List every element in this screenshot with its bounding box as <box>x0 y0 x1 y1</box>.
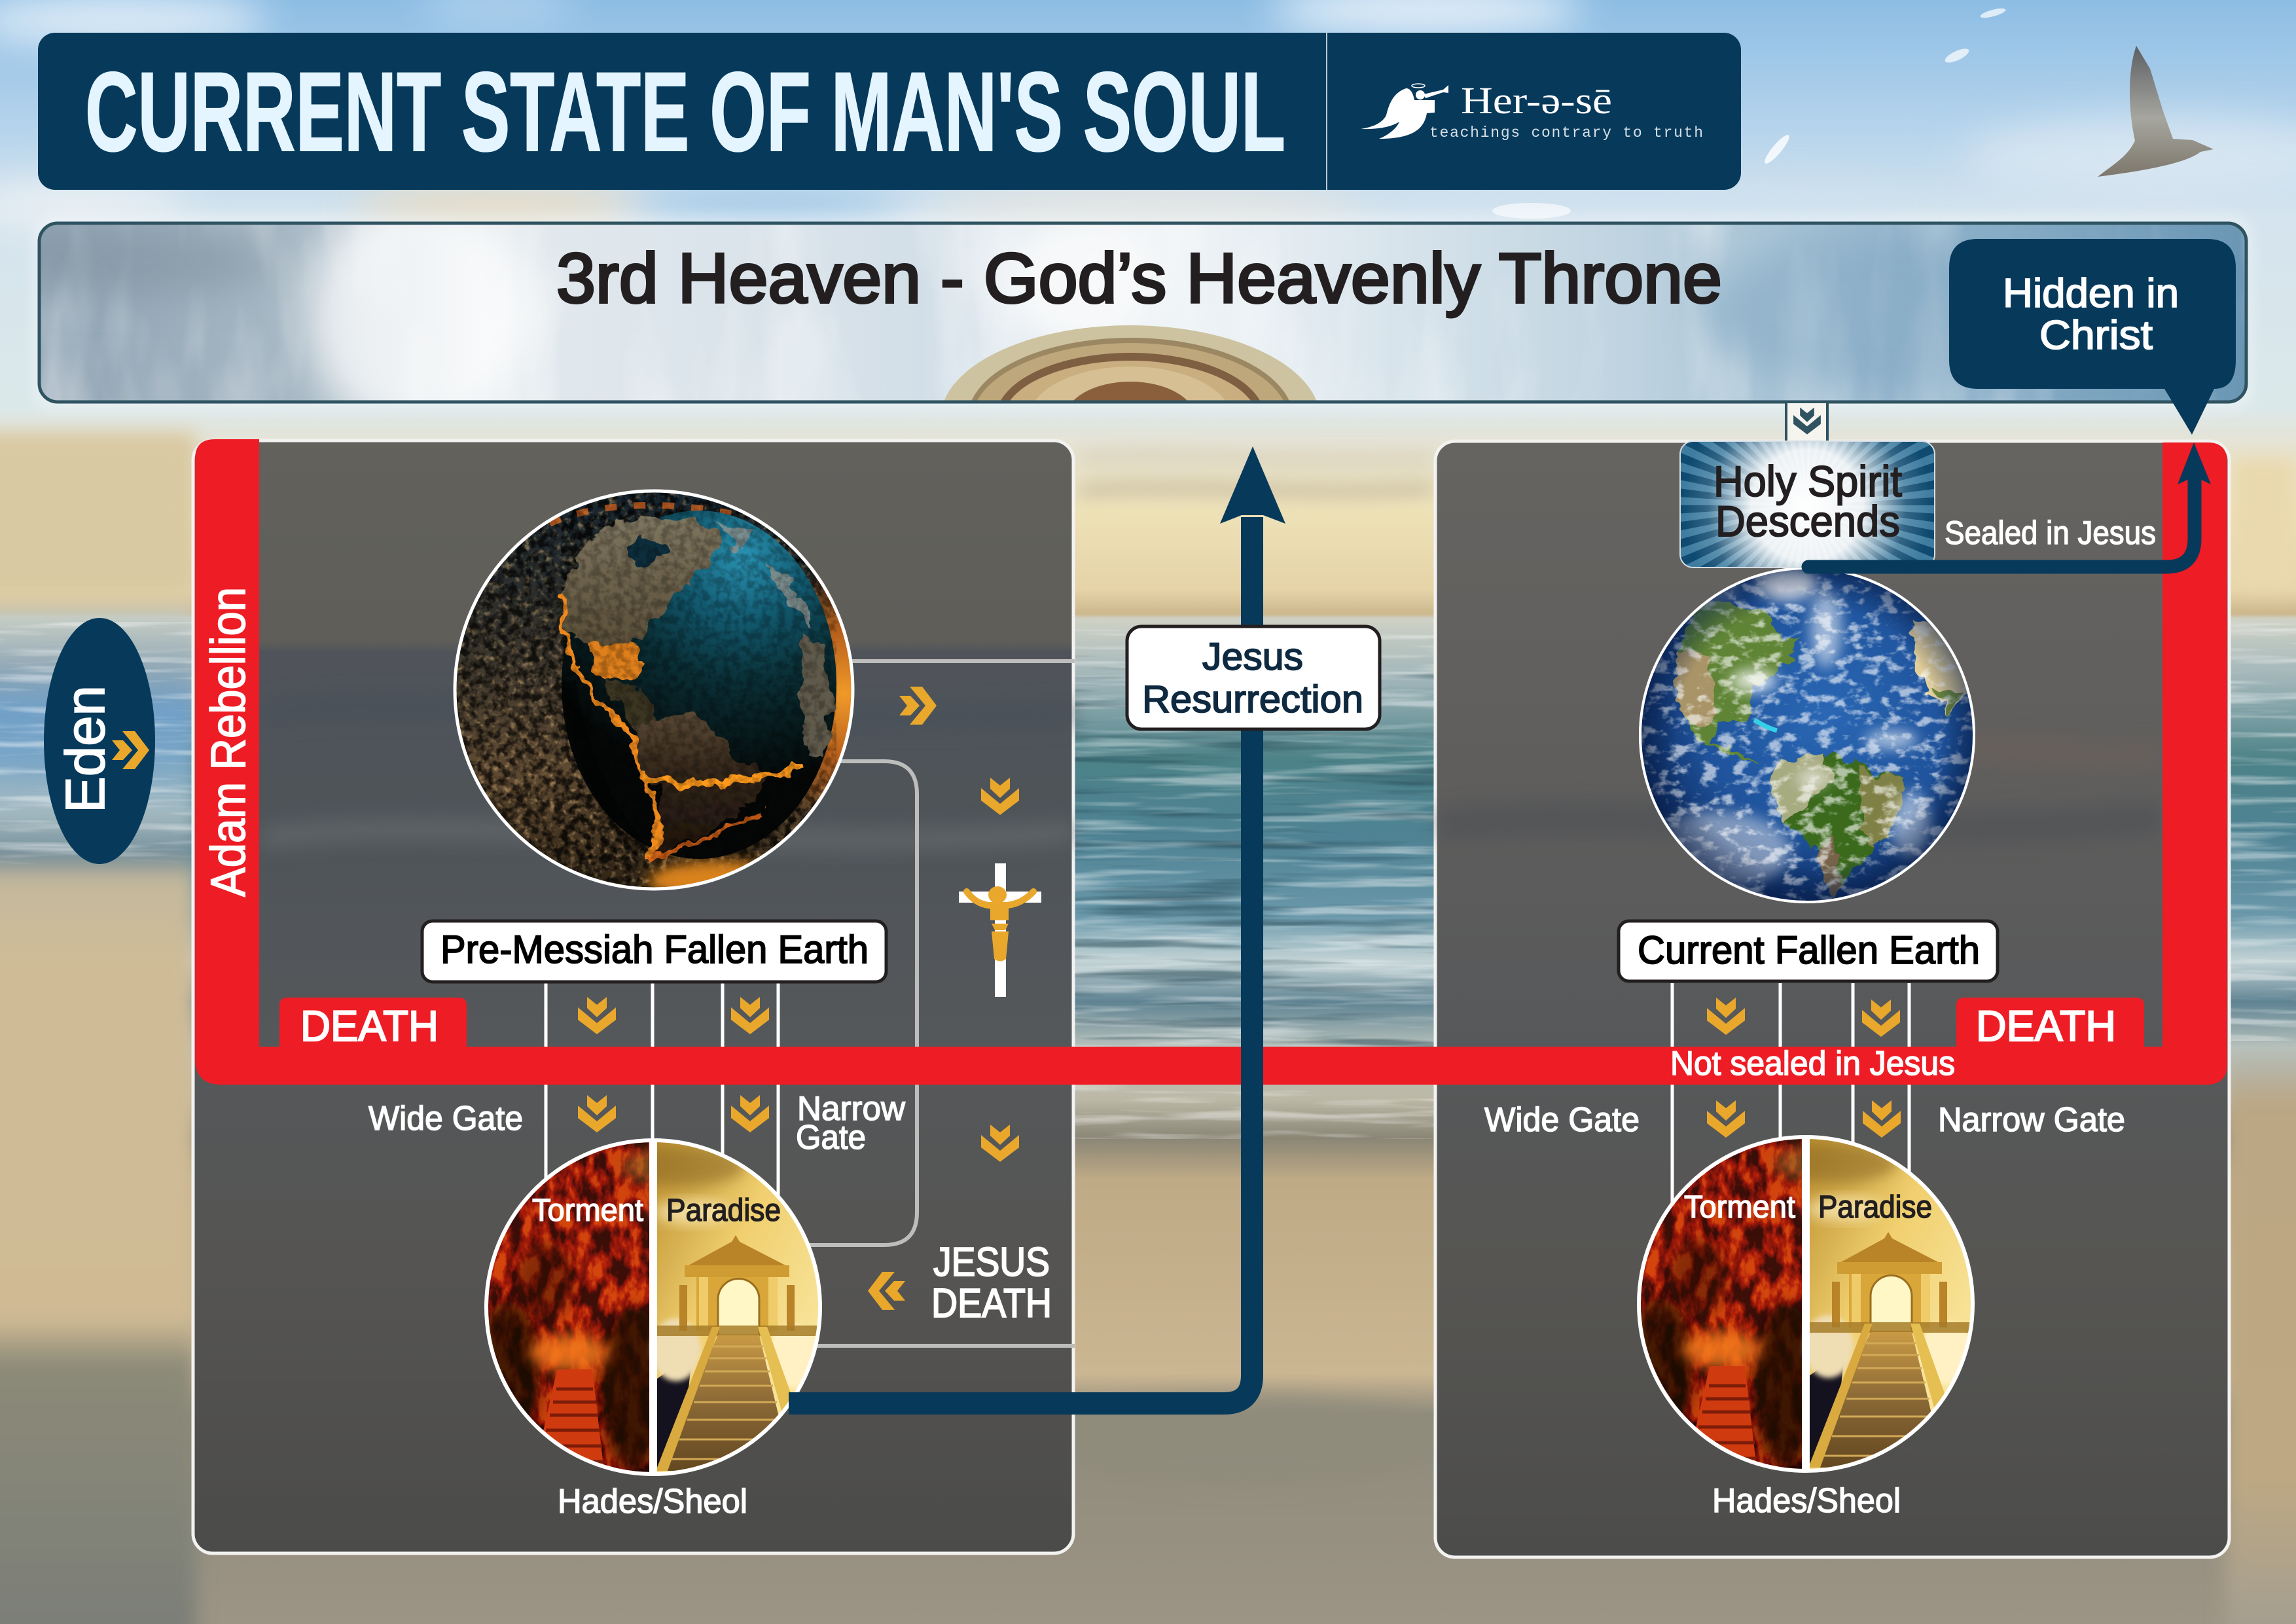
label: narrow gate: Narrow <box>797 1090 905 1128</box>
land: north america <box>563 516 721 645</box>
icon: seagull <box>2098 46 2214 177</box>
logo tagline: teachings contrary to truth <box>1429 124 1703 141</box>
label box: Jesus resurrection: Jesus <box>1202 636 1303 678</box>
death tab left <box>279 998 467 1047</box>
land: eastern fragments <box>800 632 833 762</box>
land: africa <box>1912 618 1977 714</box>
label: torment: Torment <box>532 1193 643 1228</box>
icon: trumpeting angel <box>1361 84 1448 139</box>
sea streak texture <box>1073 628 1440 1139</box>
label box: Jesus resurrection: Resurrection <box>1142 678 1363 721</box>
icon: chevron right <box>112 731 149 769</box>
icon: pre-messiah burning earth <box>453 490 855 890</box>
text labels: left panel <box>368 1090 1052 1521</box>
label box: pre-messiah fallen earth <box>422 921 886 982</box>
panel: 3rd heaven <box>0 196 2253 513</box>
label: paradise: Paradise <box>666 1193 781 1228</box>
connector: holy spirit descends <box>1786 403 1827 442</box>
label: death left: DEATH <box>300 1001 439 1050</box>
land: south america <box>634 712 768 858</box>
heading: 3rd heaven: 3rd Heaven - God’s Heavenly Throne <box>556 238 1722 317</box>
land: south america <box>1770 753 1904 898</box>
death tab right <box>1956 998 2144 1047</box>
panel: holy spirit descends <box>1676 374 1938 636</box>
icon: crucifix <box>959 863 1041 997</box>
label: jesus death: JESUS <box>933 1240 1050 1285</box>
label: Eden: Eden <box>54 685 116 813</box>
logo name: Her-ə-sē <box>1461 79 1612 122</box>
red band: death boundary <box>195 439 2227 1085</box>
title: CURRENT STATE OF MAN'S SOUL <box>85 49 1285 175</box>
panel: current era <box>1435 441 2229 1557</box>
icon: hades sheol right <box>1628 1136 1974 1472</box>
label: paradise: Paradise <box>1818 1190 1932 1225</box>
label: narrow gate: Narrow Gate <box>1938 1101 2125 1139</box>
label box: Jesus resurrection <box>1127 626 1380 729</box>
label: hades sheol: Hades/Sheol <box>558 1483 747 1521</box>
icon: throne dome <box>944 325 1317 401</box>
label: adam rebellion: Adam Rebellion <box>201 587 255 897</box>
label: sealed in Jesus: Sealed in Jesus <box>1945 514 2156 551</box>
label: jesus death: DEATH <box>931 1281 1052 1326</box>
label: wide gate: Wide Gate <box>368 1100 523 1138</box>
icon: hades sheol left <box>475 1139 821 1475</box>
connector lines: right gates <box>1672 983 1909 1218</box>
callout text line 1: Hidden in <box>2003 271 2179 316</box>
label: jesus death <box>931 1240 1052 1326</box>
label box: current fallen earth <box>1619 921 1998 981</box>
label: narrow gate <box>796 1090 905 1157</box>
label box: current fallen earth: Current Fallen Earth <box>1638 928 1980 972</box>
logo: Her-ə-sē <box>1361 79 1703 141</box>
connector lines: left gates <box>546 983 778 1204</box>
panel wave texture <box>262 705 2160 840</box>
panel: pre-messiah era <box>193 441 1073 1553</box>
text labels: right panel <box>1484 1101 2125 1520</box>
label: not sealed in Jesus: Not sealed in Jesus <box>1670 1045 1955 1083</box>
label: narrow gate: Gate <box>796 1119 866 1157</box>
label: hades sheol: Hades/Sheol <box>1712 1482 1901 1520</box>
arrow: sealed in Jesus <box>1808 442 2211 567</box>
label: wide gate: Wide Gate <box>1484 1101 1640 1139</box>
label: torment: Torment <box>1684 1190 1795 1225</box>
title banner <box>38 33 1741 190</box>
label: death right: DEATH <box>1976 1001 2116 1050</box>
chevrons: gold direction markers <box>578 687 1901 1310</box>
callout: hidden in Christ <box>1949 239 2236 435</box>
land: mexico lava <box>592 641 645 683</box>
connector lines: Jesus route <box>798 661 1075 1346</box>
callout text line 2: Christ <box>2039 313 2153 358</box>
land: north america <box>1673 600 1803 765</box>
arrow: Jesus resurrection <box>789 446 1285 1403</box>
text: descends: Descends <box>1715 497 1900 545</box>
icon: eden badge <box>44 618 155 864</box>
text: holy spirit: Holy Spirit <box>1713 457 1902 505</box>
clouds <box>1636 564 1977 905</box>
icon: current blue earth <box>1636 564 1977 905</box>
lava coast lines <box>563 592 657 858</box>
label box: pre-messiah fallen earth: Pre-Messiah Fallen Earth <box>440 928 869 971</box>
